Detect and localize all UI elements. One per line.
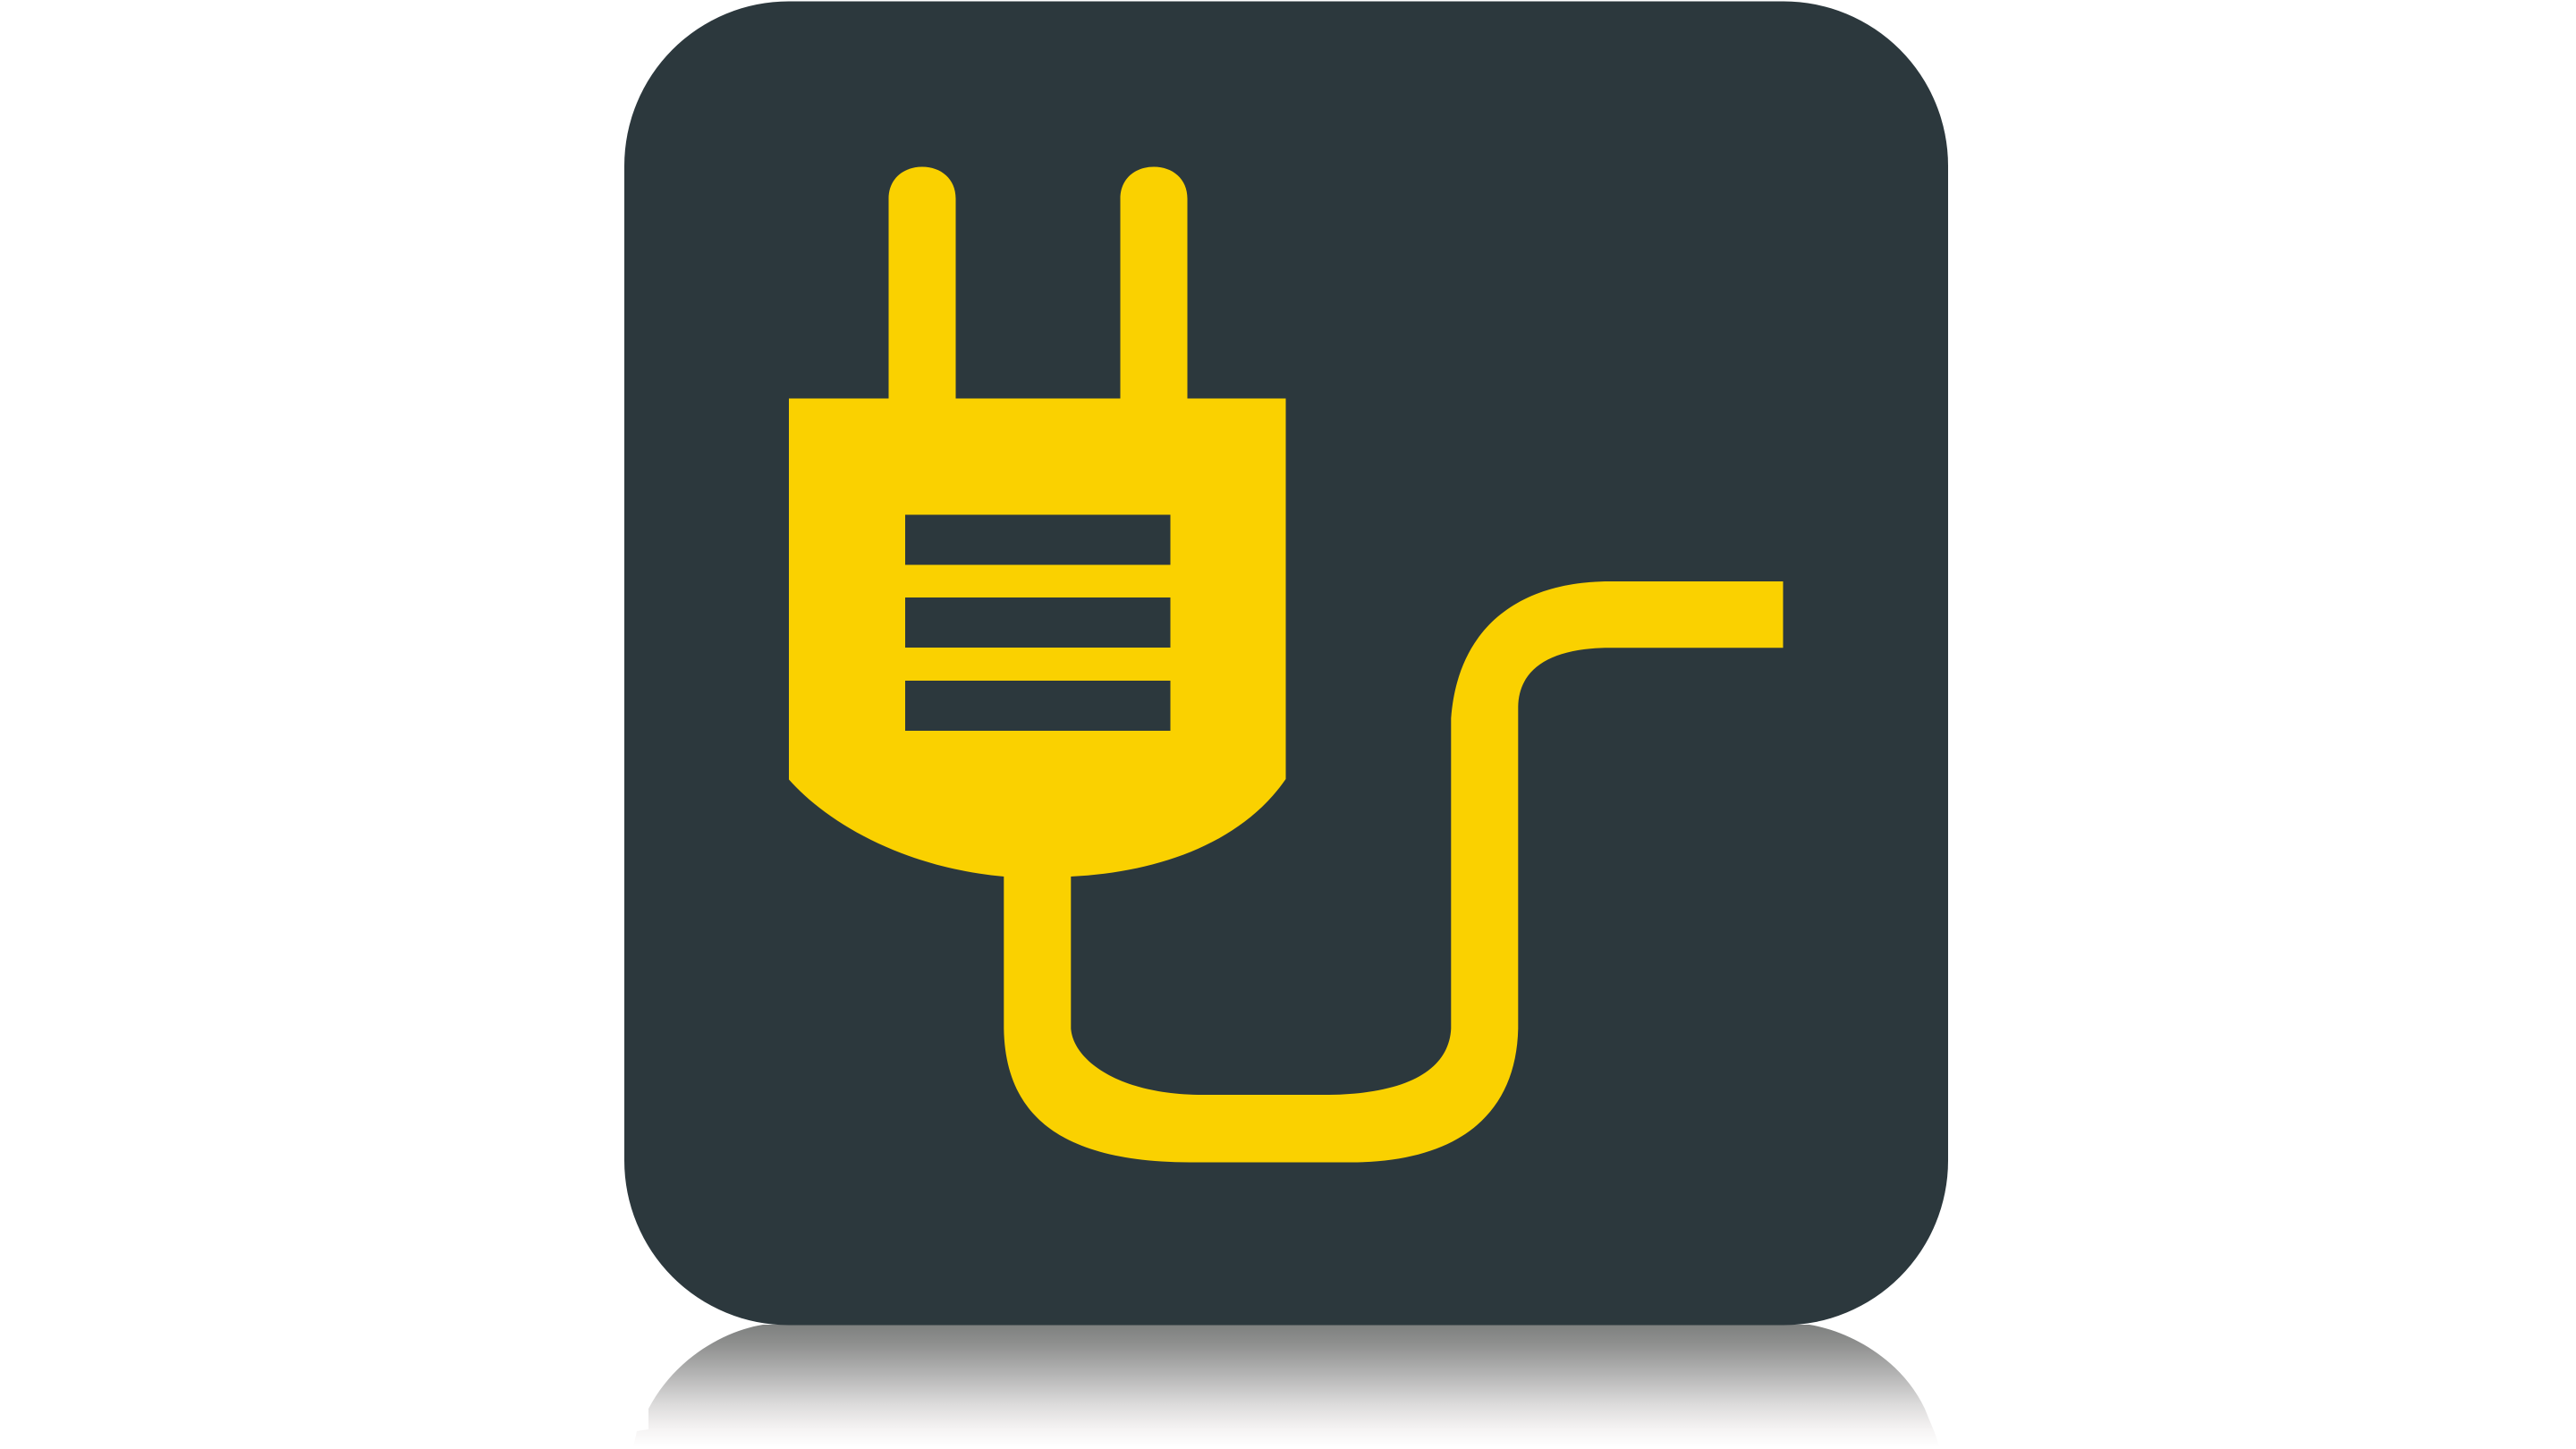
vent middle [905, 597, 1170, 648]
plug prongs [889, 166, 1188, 402]
power cord [1004, 581, 1784, 1163]
vent top [905, 515, 1170, 565]
reflection of tile [633, 1325, 1939, 1447]
plug body [789, 399, 1286, 877]
dark rounded tile [624, 2, 1948, 1326]
plug vents [905, 515, 1170, 731]
icon: plug [789, 166, 1784, 1163]
vent bottom [905, 681, 1170, 731]
